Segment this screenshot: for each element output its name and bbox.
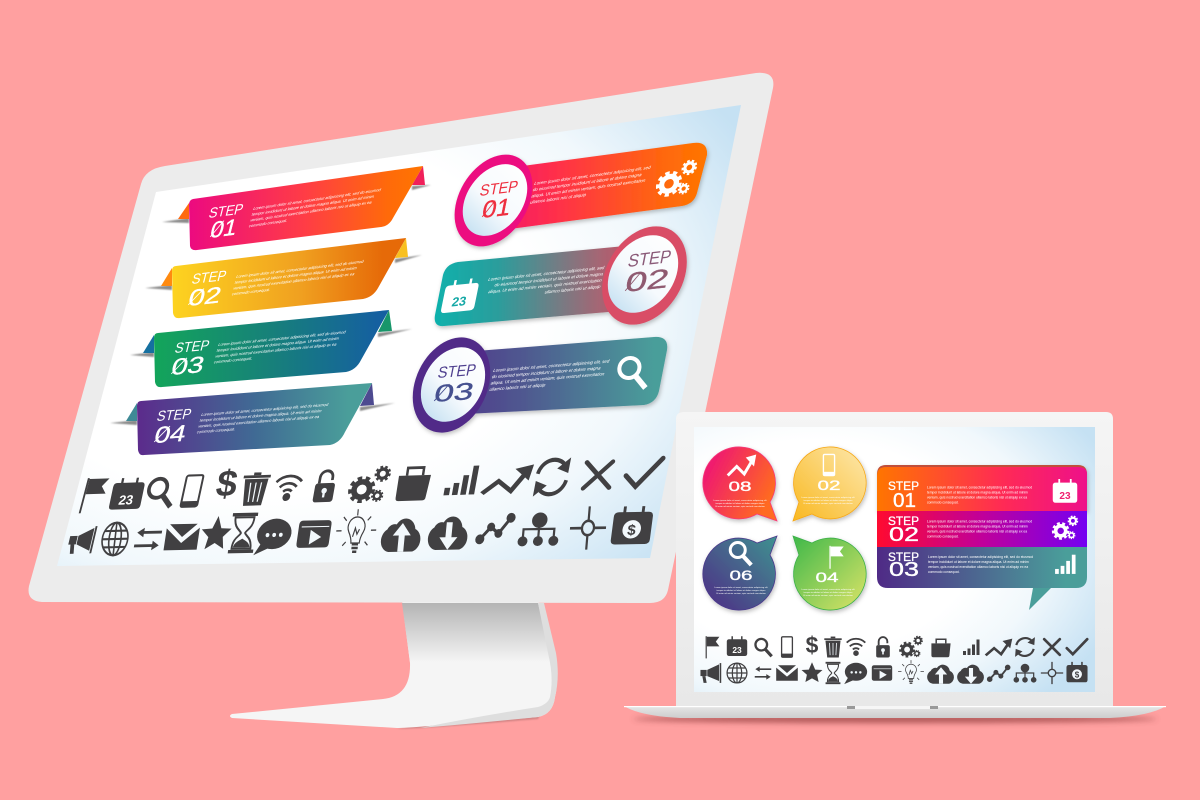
icon: gears — [900, 636, 922, 657]
icon: gears — [1053, 516, 1077, 539]
step row 3: commodo consequat. — [928, 570, 960, 574]
bubble 4: tempor incididunt ut labore et dolore magna aliqua — [804, 591, 853, 594]
bubble 3: Lorem ipsum dolor sit amet, consectetur adipisicing elit — [714, 586, 768, 589]
icon: calendar: 23 — [732, 645, 742, 655]
icon: swap arrows — [755, 666, 771, 680]
icon: swap arrows — [133, 527, 163, 551]
icon: mail — [163, 524, 201, 550]
bubble 3: Ut enim ad minim veniam, quis nostrud exercitation — [716, 592, 767, 595]
bubble 1 — [703, 447, 777, 521]
bubble 1: tempor incididunt ut labore et dolore magna aliqua — [716, 502, 765, 505]
icon: money calendar — [1066, 662, 1088, 682]
right pill 2: Lorem ipsum dolor sit amet, consectetur adipisicing elit, sed — [488, 265, 605, 282]
left ribbon 4: Lorem ipsum dolor sit amet, consectetur adipisicing elit, sed do eiusmod — [201, 402, 330, 417]
left ribbon 3: 03 — [169, 351, 207, 380]
icon: close — [1044, 639, 1060, 655]
left ribbon 4 — [110, 383, 395, 455]
step row 1: commodo consequat. — [927, 500, 959, 504]
right pill 2: aliqua. Ut enim ad minim veniam, quis nostrud exercitation — [488, 278, 603, 294]
left ribbon 4: 04 — [152, 420, 189, 448]
icon: search — [730, 542, 751, 565]
right pill 2: ullamco laboris nisi ut aliquip — [544, 284, 602, 295]
right pill 3: aliqua. Ut enim ad minim veniam, quis nostrud exercitation — [490, 371, 605, 386]
icon: cloud upload — [380, 518, 422, 552]
bubble 2: 02 — [818, 477, 841, 493]
step row 3: Lorem ipsum dolor sit amet, consectetur adipisicing elit, sed do eiusmod — [928, 555, 1033, 559]
step row 3: veniam, quis nostrud exercitation ullamco laboris nisi ut aliquip ex ea — [928, 565, 1028, 569]
icon: dollar — [213, 462, 241, 504]
panel speech tail — [1029, 588, 1051, 610]
bubble 1: Ut enim ad minim veniam, quis nostrud exercitation — [715, 505, 766, 508]
icon: phone — [782, 637, 792, 657]
steps panel — [877, 465, 1087, 610]
icon: lock — [876, 637, 890, 658]
icon: magnifier — [617, 358, 648, 388]
icon: nodes — [987, 665, 1010, 682]
right pill 3: Lorem ipsum dolor sit amet, consectetur adipisicing elit, sed — [493, 358, 610, 373]
icon: flag — [706, 636, 719, 658]
icon: calendar — [1053, 479, 1077, 503]
laptop screen — [694, 427, 1095, 692]
icon: bars — [1055, 555, 1076, 574]
icon: hourglass — [228, 513, 258, 553]
icon: calendar — [108, 477, 146, 510]
right pill 3 — [406, 334, 667, 436]
icon: refresh — [533, 457, 571, 497]
left ribbon 1: Lorem ipsum dolor sit amet, consectetur adipisicing elit, sed do eiusmod — [253, 187, 382, 211]
icon: cloud upload — [927, 665, 954, 684]
icon: trend arrow — [482, 464, 534, 494]
left ribbon 4: STEP — [155, 407, 193, 425]
step row 1 — [877, 467, 1087, 512]
icon: light bulb — [898, 660, 924, 683]
left ribbon 2: 02 — [186, 282, 224, 311]
icon: hierarchy — [517, 512, 561, 546]
bubble 1: Lorem ipsum dolor sit amet, consectetur adipisicing elit — [713, 499, 767, 502]
left ribbon 1: STEP — [207, 202, 245, 222]
icon: calendar — [727, 636, 747, 656]
step row 2: commodo consequat. — [927, 534, 959, 538]
bubble 2: tempor incididunt ut labore et dolore magna aliqua — [804, 499, 853, 502]
bubble 4: Ut enim ad minim veniam, quis nostrud exercitation — [803, 594, 854, 597]
icon: globe — [727, 663, 747, 683]
icon: gears — [348, 467, 391, 502]
bubble 3: tempor incididunt ut labore et dolore magna aliqua — [717, 589, 766, 592]
step row 1: tempor incididunt ut labore et dolore magna aliqua. Ut enim ad minim — [927, 490, 1028, 494]
left ribbon 3: Lorem ipsum dolor sit amet, consectetur adipisicing elit, sed do eiusmod — [218, 329, 347, 347]
left ribbon 2: STEP — [190, 268, 228, 288]
step row 1: Lorem ipsum dolor sit amet, consectetur adipisicing elit, sed do eiusmod — [927, 486, 1032, 490]
icon: calendar: 23 — [451, 293, 468, 310]
step row 3 — [877, 547, 1087, 588]
icon: money calendar: $ — [1075, 670, 1080, 679]
icon: video — [296, 520, 332, 548]
left ribbon 2: veniam, quis nostrud exercitation ullamco laboris nisi ut aliquip ex ea — [233, 271, 356, 291]
icon: hourglass — [826, 662, 840, 684]
left ribbon 2: tempor incididunt ut labore et dolore magna aliqua. Ut enim ad minim — [234, 265, 358, 285]
icon: check — [625, 458, 663, 487]
bubble 4 — [793, 536, 866, 610]
right pill 1: aliqua. Ut enim ad minim veniam, quis nostrud exercitation — [531, 178, 646, 199]
step row 2: Lorem ipsum dolor sit amet, consectetur adipisicing elit, sed do eiusmod — [927, 520, 1032, 524]
right pill 2: STEP — [626, 245, 673, 271]
icon: close — [583, 462, 613, 488]
bubble 2: Ut enim ad minim veniam, quis nostrud exercitation — [803, 502, 854, 505]
icon: cloud download — [957, 665, 984, 684]
step row 3: tempor incididunt ut labore et dolore magna aliqua. Ut enim ad minim — [928, 560, 1029, 564]
right pill 3: do eiusmod tempor incididunt ut labore et dolore magna — [492, 365, 602, 379]
right pill 3: ullamco laboris nisi ut aliquip — [489, 382, 546, 392]
icon: target — [1041, 662, 1063, 684]
icon: flag — [80, 477, 110, 513]
step row 2: STEP — [888, 514, 919, 528]
step row 2: veniam, quis nostrud exercitation ullamco laboris nisi ut aliquip ex ea — [927, 530, 1027, 534]
icon: lock — [312, 470, 338, 502]
icon: search — [755, 639, 772, 656]
left ribbon 1: 01 — [208, 214, 240, 243]
icon: trend arrow — [728, 454, 756, 476]
bubble 2: Lorem ipsum dolor sit amet, consectetur adipisicing elit — [801, 496, 855, 499]
left ribbon 2 — [145, 238, 422, 318]
icon: target — [568, 506, 608, 550]
left ribbon 1: tempor incididunt ut labore et dolore magna aliqua. Ut enim ad minim — [251, 194, 375, 217]
monitor screen — [57, 105, 741, 566]
left ribbon 3: veniam, quis nostrud exercitation ullamco laboris nisi ut aliquip ex ea — [215, 341, 338, 359]
step row 3: STEP — [888, 550, 919, 564]
laptop — [624, 412, 1166, 723]
icon: phone — [823, 454, 835, 476]
icon: mail — [776, 665, 798, 681]
icon: phone — [180, 475, 204, 507]
left ribbon 4: tempor incididunt ut labore et dolore magna aliqua. Ut enim ad minim — [199, 408, 323, 423]
icon: cloud download — [427, 516, 469, 550]
step row 2 — [877, 511, 1087, 547]
monitor frame — [29, 73, 773, 603]
bubble 1: 08 — [728, 478, 752, 494]
right pill 3: 03 — [432, 378, 476, 408]
right pill 2: 02 — [623, 263, 672, 298]
left ribbon 3: STEP — [173, 338, 211, 357]
icon: globe — [100, 522, 130, 556]
laptop shadow — [633, 715, 1157, 723]
step row 3: 03 — [889, 559, 919, 581]
bubble 4: Lorem ipsum dolor sit amet, consectetur adipisicing elit — [801, 588, 855, 591]
icon: gears — [656, 160, 697, 196]
icon: megaphone — [700, 663, 721, 683]
icon: calendar: 23 — [1059, 491, 1071, 502]
step row 1: 01 — [893, 490, 916, 512]
icon: trend arrow — [986, 639, 1012, 655]
icon: wifi — [847, 639, 865, 655]
icon: bars — [963, 640, 980, 655]
right pill 1: do eiusmod tempor incididunt ut labore et dolore magna — [532, 172, 643, 192]
left ribbon 4: veniam, quis nostrud exercitation ullamco laboris nisi ut aliquip ex ea — [198, 414, 321, 429]
left ribbon 4: commodo consequat. — [196, 426, 236, 434]
right pill 1: STEP — [478, 178, 520, 200]
icon: money calendar: $ — [626, 522, 637, 539]
monitor — [29, 73, 773, 729]
icon: calendar: 23 — [117, 492, 135, 508]
right pill 1: Lorem ipsum dolor sit amet, consectetur adipisicing elit, sed — [534, 165, 652, 186]
step row 1: veniam, quis nostrud exercitation ullamco laboris nisi ut aliquip ex ea — [927, 496, 1027, 500]
icon: trash — [238, 472, 272, 506]
icon: bars — [443, 466, 479, 495]
icon: star — [802, 662, 822, 682]
right pill 2 — [435, 222, 694, 329]
right pill 3: STEP — [436, 361, 478, 382]
icon: briefcase — [931, 639, 951, 657]
icon: hierarchy — [1014, 664, 1036, 683]
icon: flag — [830, 546, 844, 569]
icon: light bulb — [334, 509, 378, 552]
left ribbon 1 — [162, 166, 431, 250]
icon: refresh — [1015, 637, 1035, 657]
icon: money calendar — [610, 506, 654, 545]
right pill 1: ullamco laboris nisi ut aliquip — [530, 192, 587, 205]
step row 1: STEP — [888, 479, 919, 493]
icon: nodes — [475, 513, 516, 544]
monitor stand — [230, 600, 558, 729]
left ribbon 3: tempor incididunt ut labore et dolore magna aliqua. Ut enim ad minim — [216, 336, 340, 353]
icon: briefcase — [395, 467, 432, 501]
left ribbon 3 — [130, 310, 412, 387]
right pill 1: 01 — [480, 194, 513, 224]
icon: chat — [253, 518, 294, 555]
step row 2: tempor incididunt ut labore et dolore magna aliqua. Ut enim ad minim — [927, 524, 1028, 528]
icon: search — [145, 478, 176, 508]
icon: star — [199, 516, 234, 549]
right pill 2: do eiusmod tempor incididunt ut labore et dolore magna — [494, 271, 604, 287]
laptop base — [624, 706, 1166, 718]
left ribbon 1: commodo consequat. — [248, 218, 288, 228]
bubble 2 — [793, 447, 866, 521]
laptop icon set — [700, 632, 1088, 684]
left ribbon 1: veniam, quis nostrud exercitation ullamco laboris nisi ut aliquip ex ea — [250, 200, 373, 223]
icon: trash — [824, 637, 842, 657]
left ribbon 2: commodo consequat. — [231, 287, 271, 296]
bubble 3: 06 — [730, 567, 753, 583]
icon: check — [1067, 639, 1087, 654]
icon: chat — [844, 663, 867, 684]
right pill 1 — [447, 143, 707, 251]
left ribbon 3: commodo consequat. — [213, 356, 253, 364]
monitor icon set — [66, 457, 663, 556]
icon: wifi — [273, 476, 303, 500]
icon: video — [872, 665, 892, 681]
bubble 3 — [703, 536, 777, 610]
step row 2: 02 — [889, 524, 919, 546]
icon: dollar — [806, 632, 819, 658]
icon: megaphone — [66, 526, 98, 554]
icon: calendar — [440, 278, 480, 313]
bubble 4: 04 — [816, 569, 839, 585]
left ribbon 2: Lorem ipsum dolor sit amet, consectetur adipisicing elit, sed do eiusmod — [236, 259, 365, 279]
laptop lid — [676, 412, 1113, 708]
